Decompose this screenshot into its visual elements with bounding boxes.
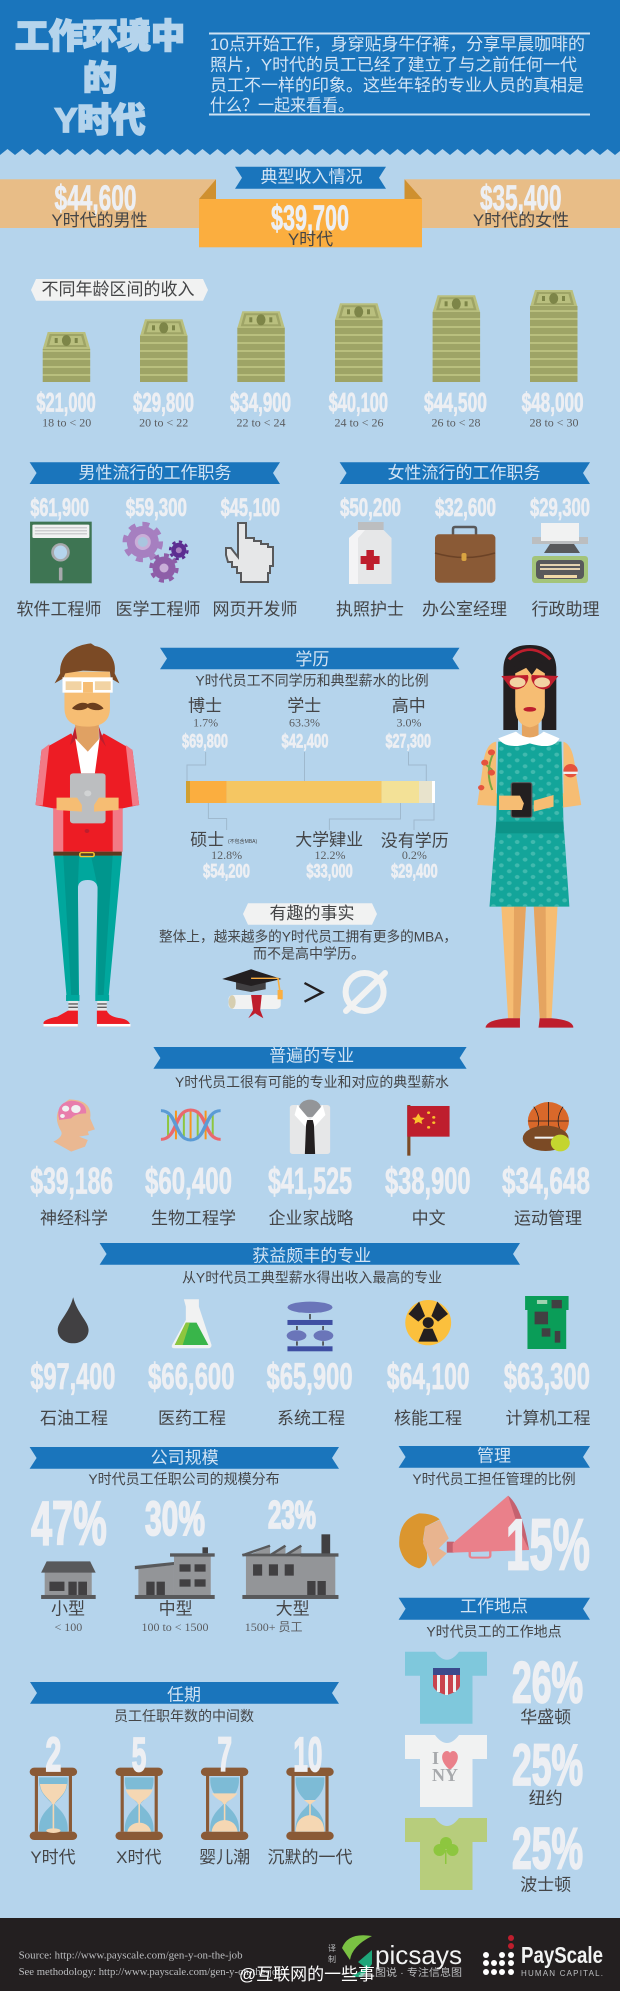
banner: company size: 公司规模 (151, 1448, 219, 1468)
job salaries: $32,600 (435, 494, 496, 522)
banner: typical income: 典型收入情况 (260, 168, 362, 186)
common majors labels: 生物工程学 (151, 1209, 236, 1228)
icon: new york shirt: I (432, 1748, 439, 1768)
tenure labels: Y时代 (30, 1848, 76, 1867)
common majors salaries (30, 1160, 590, 1201)
icon: floppy disk (30, 522, 92, 583)
Boston stat (512, 1816, 583, 1894)
stack 18 to 20: 18 to < 20 (42, 416, 91, 430)
leader lines (187, 752, 434, 830)
tag: income by age: 不同年龄区间的收入 (42, 280, 194, 299)
lucrative majors labels: 系统工程 (277, 1409, 345, 1428)
job labels: 行政助理 (532, 600, 600, 619)
banner: lucrative majors: 获益颇丰的专业 (252, 1246, 371, 1266)
icon: woman with megaphone (399, 1496, 529, 1568)
icon: systems diagram (287, 1302, 333, 1351)
icon: china flag (407, 1105, 450, 1156)
company size labels: 1500+ 员工 (245, 1620, 302, 1634)
hourglass: baby boomers: 7 (218, 1728, 232, 1782)
hourglass: silent generation (286, 1728, 334, 1840)
degree labels below: $29,400 (391, 861, 438, 883)
lucrative majors salaries: $65,900 (266, 1356, 353, 1397)
stacked bar (186, 781, 435, 803)
icon: medicine bottle (349, 522, 392, 584)
company size labels: < 100 (55, 1620, 82, 1634)
job salaries: $61,900 (30, 494, 89, 522)
stack 26 to 28: 26 to < 28 (431, 416, 481, 430)
Washington stat (512, 1651, 583, 1727)
banner: lucrative majors (100, 1243, 520, 1266)
stack 20 to 22 (133, 319, 194, 430)
fun fact text: 而不是高中学历。 (253, 945, 365, 961)
degree labels above (182, 696, 431, 752)
lucrative majors subtitle: 从Y时代员工典型薪水得出收入最高的专业 (182, 1270, 442, 1286)
lucrative majors salaries: $66,600 (148, 1356, 234, 1397)
common majors labels: 中文 (412, 1209, 446, 1228)
degree labels below: 12.2% (314, 848, 346, 862)
degree labels below: (不包含MBA) (228, 838, 258, 845)
icon: radiation symbol (405, 1300, 451, 1345)
Boston stat: 波士顿 (520, 1876, 571, 1894)
icon: typewriter (532, 523, 588, 583)
banner: common majors: 普遍的专业 (269, 1046, 354, 1066)
sources (19, 1950, 283, 1978)
icon: shirt and tie (290, 1100, 330, 1154)
icon: gears (125, 524, 188, 581)
company size labels: 大型 (276, 1600, 310, 1618)
stack 22 to 24 (230, 311, 291, 430)
picsays logo: 译 (328, 1944, 336, 1953)
icon: small building (41, 1561, 96, 1599)
chart: education split bar (182, 696, 449, 883)
panel: income ribbon: Y时代的女性 (473, 211, 569, 230)
degree labels below: $33,000 (306, 861, 353, 883)
banner: typical income (235, 167, 386, 189)
Washington stat: 华盛顿 (520, 1708, 571, 1727)
stack 18 to 20 (36, 332, 96, 430)
panel: income ribbon: $35,400 (480, 179, 562, 218)
degree labels above: 博士 (188, 696, 222, 716)
banner: education: 学历 (295, 650, 329, 669)
panel: income ribbon (0, 179, 620, 249)
job salaries: $59,300 (126, 494, 187, 522)
banner: female jobs (340, 462, 590, 484)
job salaries: $50,200 (340, 494, 401, 522)
job salaries: $45,100 (221, 494, 280, 522)
intro paragraph (209, 32, 590, 116)
lucrative majors salaries (30, 1356, 590, 1397)
icon: flask (172, 1299, 212, 1348)
degree labels above: $27,300 (386, 730, 431, 752)
illustration: woman (477, 645, 581, 1028)
sources: See methodology: http://www.payscale.com/gen-y-on-the-job (19, 1967, 283, 1978)
stack 28 to 30 (522, 290, 584, 430)
intro paragraph: 10点开始工作，身穿贴身牛仔裤，分享早晨咖啡的 (210, 35, 585, 54)
location subtitle: Y时代员工的工作地点 (426, 1624, 562, 1640)
degree labels above: $42,400 (282, 730, 329, 752)
degree labels below: 没有学历 (381, 832, 449, 850)
job salaries: $29,300 (530, 494, 590, 522)
icon: brain head (53, 1099, 95, 1152)
degree labels above: 3.0% (396, 716, 422, 730)
company size labels (51, 1600, 310, 1634)
banner: tenure (30, 1682, 339, 1704)
tenure labels: 婴儿潮 (199, 1848, 250, 1867)
panel: income ribbon: $44,600 (54, 179, 136, 218)
common majors labels: 神经科学 (40, 1209, 108, 1228)
stack 24 to 26 (329, 303, 388, 430)
common majors salaries: $38,900 (385, 1160, 471, 1201)
banner: male jobs (30, 462, 280, 484)
sources: Source: http://www.payscale.com/gen-y-on-the-job (19, 1950, 243, 1962)
stack 26 to 28 (424, 295, 487, 430)
company size labels: 100 to < 1500 (141, 1620, 209, 1634)
panel: income ribbon: Y时代的男性 (51, 211, 148, 230)
common majors labels (40, 1209, 582, 1228)
banner: management: 管理 (477, 1446, 511, 1466)
icon: sports balls (523, 1102, 570, 1151)
icon: dna (161, 1110, 221, 1140)
icon: factory (242, 1534, 338, 1599)
fun fact text: 整体上，越来越多的Y时代员工拥有更多的MBA， (159, 929, 457, 945)
picsays logo: picsays (375, 1940, 462, 1970)
banner: location: 工作地点 (460, 1597, 528, 1616)
company size percentages: 47% (31, 1490, 107, 1559)
New York stat (512, 1733, 583, 1808)
job labels (16, 600, 600, 619)
payscale logo: PayScale (521, 1942, 603, 1968)
icon: medium building (135, 1547, 215, 1599)
icon: boston shirt (405, 1818, 487, 1890)
stack 20 to 22: 20 to < 22 (139, 416, 188, 430)
lucrative majors salaries: $97,400 (30, 1356, 115, 1397)
title: Y时代 (55, 102, 145, 140)
hourglass: generation Y (30, 1728, 77, 1840)
title (15, 18, 185, 140)
stack 20 to 22: $29,800 (133, 388, 194, 418)
payscale logo (483, 1935, 603, 1978)
degree labels below: 12.8% (211, 848, 242, 862)
icon: hand cursor (226, 523, 273, 582)
banner: tenure: 任期 (167, 1686, 201, 1704)
panel: income ribbon: $39,700 (271, 199, 349, 238)
hourglass: silent generation: 10 (293, 1728, 322, 1782)
degree labels above: $69,800 (182, 730, 228, 752)
degree labels below: 大学肄业 (295, 830, 363, 850)
icon: circuit board (525, 1296, 569, 1349)
icon: new york shirt (405, 1735, 487, 1807)
job labels: 软件工程师 (16, 600, 102, 619)
job labels: 医学工程师 (116, 600, 200, 619)
icon: oil drop (58, 1297, 89, 1343)
tenure labels (30, 1848, 352, 1867)
job labels: 执照护士 (336, 600, 404, 619)
stack 28 to 30: $48,000 (522, 388, 584, 418)
degree labels above: 学士 (287, 696, 321, 716)
banner: company size (30, 1447, 339, 1469)
company size percentages: 23% (268, 1494, 316, 1537)
icon: greater than sign (304, 983, 322, 1002)
intro paragraph: 什么？一起来看看。 (210, 96, 354, 115)
job labels: 办公室经理 (422, 600, 507, 619)
common majors labels: 运动管理 (514, 1209, 582, 1228)
degree labels above: 63.3% (289, 716, 320, 730)
common majors salaries: $39,186 (30, 1160, 113, 1201)
job labels: 网页开发师 (212, 600, 298, 619)
chart: money stacks by age (36, 290, 584, 430)
company size labels: 中型 (159, 1600, 193, 1618)
header band (0, 0, 620, 155)
tenure labels: 沉默的一代 (268, 1848, 352, 1867)
lucrative majors labels: 核能工程 (394, 1409, 462, 1428)
stack 26 to 28: $44,500 (424, 388, 487, 418)
fun fact text (159, 929, 457, 961)
degree labels below: 硕士 (190, 830, 224, 850)
illustration: man (36, 643, 139, 1027)
icon: new york shirt: NY (432, 1765, 458, 1785)
banner: female jobs: 女性流行的工作职务 (388, 464, 540, 482)
payscale logo: HUMAN CAPITAL. (521, 1969, 603, 1978)
common majors labels: 企业家战略 (268, 1209, 354, 1228)
stack 24 to 26: 24 to < 26 (334, 416, 384, 430)
lucrative majors labels: 石油工程 (40, 1409, 108, 1428)
company size percentages: 30% (145, 1492, 205, 1546)
degree labels below (190, 830, 449, 883)
banner: education (160, 648, 460, 669)
picsays logo (328, 1935, 462, 1979)
job salaries (30, 494, 590, 522)
stack 22 to 24: 22 to < 24 (236, 416, 286, 430)
tenure subtitle: 员工任职年数的中间数 (114, 1708, 254, 1724)
picsays logo: 制 (328, 1954, 336, 1964)
stack 22 to 24: $34,900 (230, 388, 291, 418)
degree labels above: 高中 (392, 696, 426, 716)
tag: fun fact (243, 903, 377, 925)
icon: washington shirt (405, 1652, 487, 1724)
lucrative majors labels (40, 1409, 590, 1428)
stack 28 to 30: 28 to < 30 (529, 416, 579, 430)
stack 18 to 20: $21,000 (36, 388, 96, 418)
lucrative majors labels: 医药工程 (158, 1409, 226, 1428)
watermark: @互联网的一些事 (239, 1965, 375, 1984)
common majors subtitle: Y时代员工很有可能的专业和对应的典型薪水 (175, 1074, 449, 1090)
title: 工作环境中 (15, 18, 185, 56)
intro paragraph: 员工不一样的印象。这些年轻的专业人员的真相是 (210, 76, 584, 95)
company size subtitle: Y时代员工任职公司的规模分布 (88, 1471, 280, 1487)
management subtitle: Y时代员工担任管理的比例 (412, 1471, 576, 1487)
title: 的 (83, 60, 117, 98)
company size percentages (31, 1490, 316, 1559)
tag: fun fact: 有趣的事实 (270, 904, 354, 923)
icon: graduation cap and diploma (222, 969, 283, 1018)
hourglass: generation Y: 2 (46, 1728, 61, 1782)
banner: location (399, 1597, 590, 1620)
degree labels below: $54,200 (203, 861, 250, 883)
hourglass: baby boomers (201, 1728, 248, 1840)
banner: management (399, 1446, 590, 1468)
panel: income ribbon: Y时代 (288, 230, 333, 249)
banner: male jobs: 男性流行的工作职务 (78, 464, 232, 482)
lucrative majors labels: 计算机工程 (506, 1409, 590, 1428)
degree labels below: 0.2% (402, 848, 427, 862)
company size labels: 小型 (51, 1600, 85, 1618)
intro paragraph: 照片，Y时代的员工已经了建立了与之前任何一代 (210, 56, 577, 74)
common majors salaries: $60,400 (145, 1160, 232, 1201)
tenure labels: X时代 (116, 1848, 161, 1867)
footer (0, 1918, 620, 1991)
banner: common majors (153, 1046, 467, 1069)
New York stat: 纽约 (529, 1789, 563, 1808)
picsays logo: 图说 · 专注信息图 (375, 1966, 462, 1979)
stack 24 to 26: $40,100 (329, 388, 388, 418)
education subtitle: Y时代员工不同学历和典型薪水的比例 (195, 673, 429, 689)
icon: briefcase (435, 527, 495, 583)
lucrative majors salaries: $64,100 (387, 1356, 470, 1397)
icon: empty set (346, 973, 385, 1011)
hourglass: generation X (115, 1728, 163, 1840)
hourglass: generation X: 5 (132, 1728, 146, 1782)
degree labels above: 1.7% (193, 716, 218, 730)
common majors salaries: $41,525 (268, 1160, 352, 1201)
